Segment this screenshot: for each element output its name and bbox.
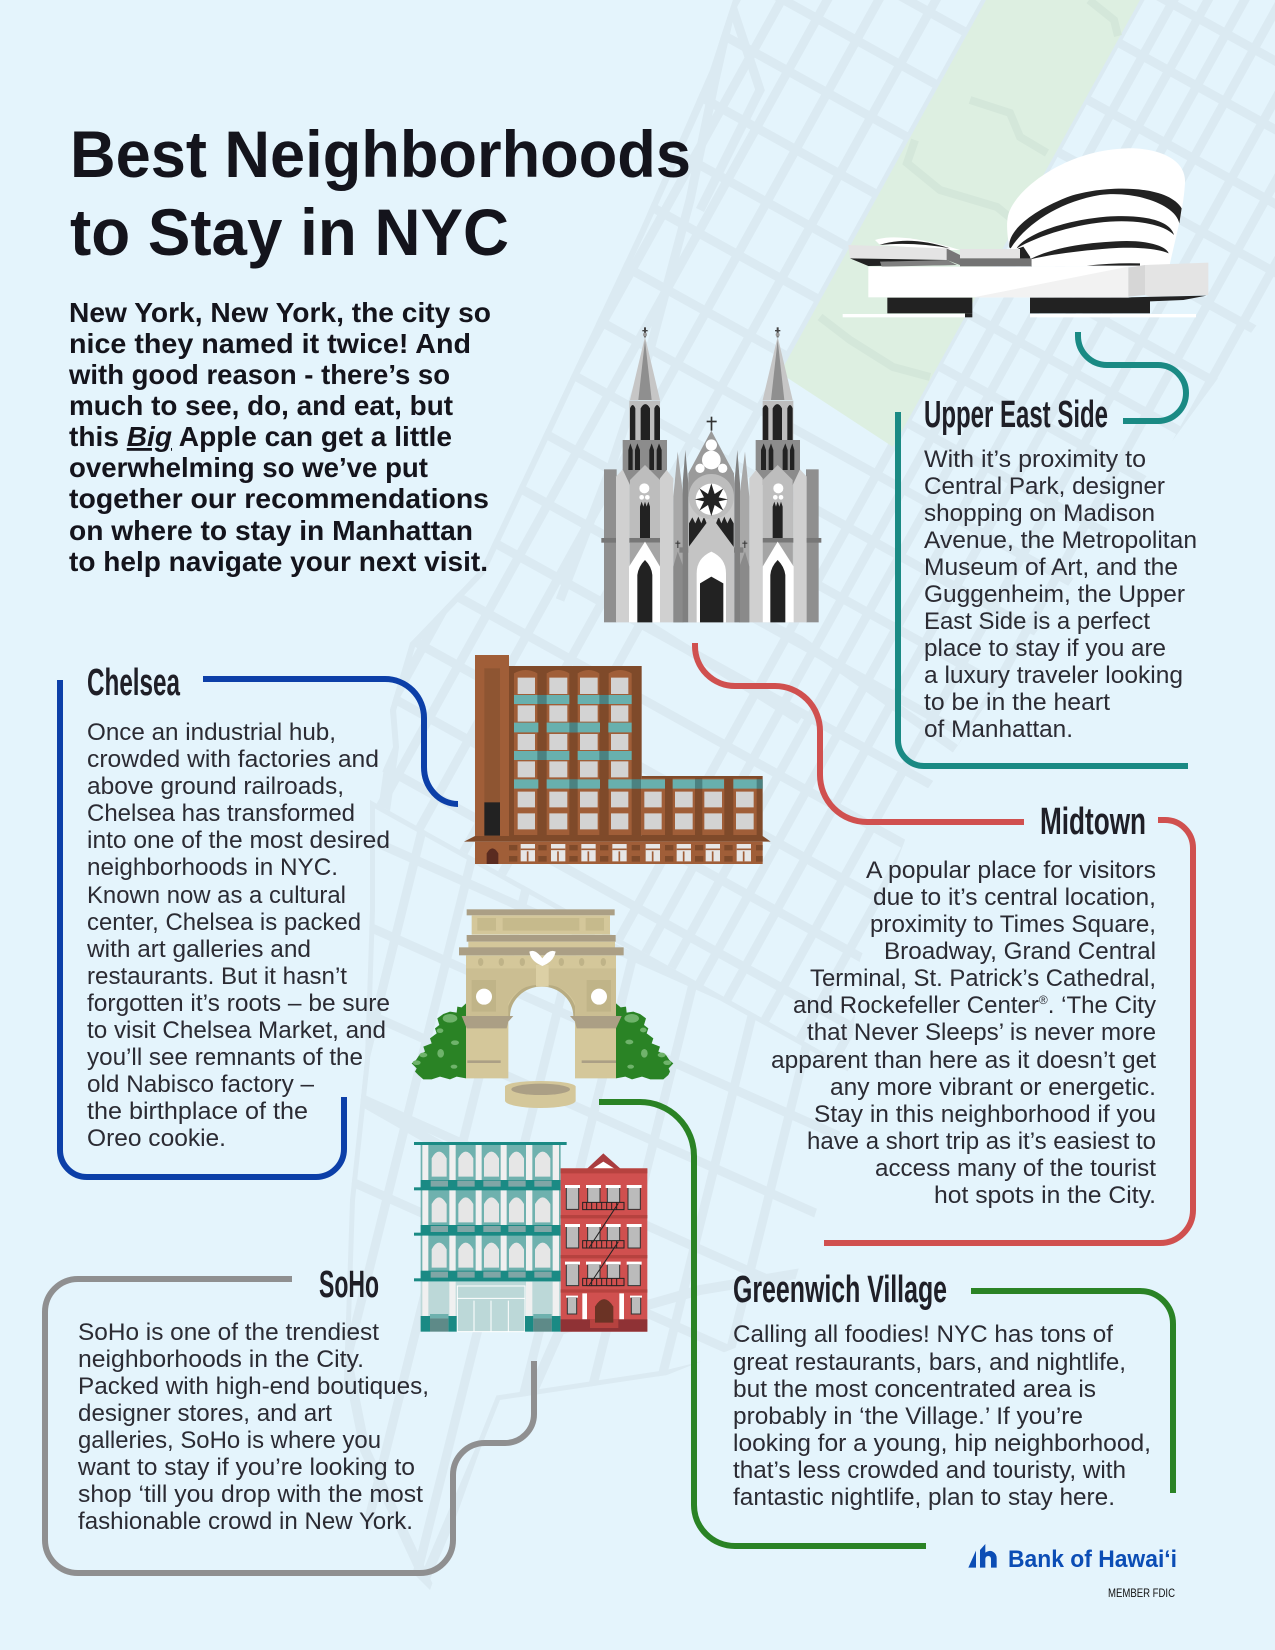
title: Best Neighborhoods bbox=[70, 117, 691, 191]
intro paragraph: New York, New York, the city so bbox=[69, 297, 491, 328]
text: Chelsea description: neighborhoods in NYC. bbox=[87, 854, 338, 881]
text: Greenwich Village description: great restaurants, bars, and nightlife, bbox=[733, 1349, 1126, 1376]
text: Midtown description: hot spots in the City. bbox=[934, 1182, 1156, 1209]
text: Midtown description bbox=[771, 857, 1156, 1209]
logo wordmark: Bank of Hawai‘i bbox=[1008, 1546, 1177, 1573]
intro paragraph: this Big Apple can get a little bbox=[69, 421, 452, 452]
text: Midtown description: any more vibrant or energetic. bbox=[830, 1074, 1156, 1101]
text: Chelsea description: with art galleries and bbox=[86, 936, 311, 963]
heading: Upper East Side: Upper East Side bbox=[924, 394, 1108, 436]
text: Upper East Side description: place to stay if you are bbox=[924, 635, 1166, 662]
connector line: Upper East Side bbox=[898, 332, 1188, 766]
text: Midtown description: A popular place for visitors bbox=[866, 857, 1156, 884]
heading: SoHo: SoHo bbox=[319, 1264, 379, 1306]
text: Chelsea description: you’ll see remnants of the bbox=[87, 1044, 363, 1071]
text: Chelsea description: Once an industrial hub, bbox=[87, 719, 336, 746]
text: Greenwich Village description: probably in ‘the Village.’ If you’re bbox=[733, 1403, 1083, 1430]
icon: Washington Square Arch bbox=[412, 909, 673, 1108]
panel: Greenwich Village bbox=[599, 1102, 1173, 1546]
text: SoHo description: designer stores, and art bbox=[78, 1400, 332, 1427]
text: SoHo description: want to stay if you’re looking to bbox=[77, 1454, 415, 1481]
text: Chelsea description: restaurants. But it hasn’t bbox=[87, 963, 347, 990]
text: Greenwich Village description: Calling all foodies! NYC has tons of bbox=[733, 1321, 1113, 1348]
icon: Guggenheim Museum bbox=[843, 148, 1208, 317]
icon: St. Patrick's Cathedral bbox=[601, 327, 821, 622]
text: Midtown description: due to it’s central location, bbox=[873, 884, 1156, 911]
connector line: Midtown bbox=[695, 643, 1193, 1243]
text: Upper East Side description: Central Park, designer bbox=[924, 473, 1165, 500]
text: Midtown description: and Rockefeller Center bbox=[793, 992, 1038, 1019]
intro paragraph: overwhelming so we’ve put bbox=[69, 452, 428, 483]
intro paragraph: together our recommendations bbox=[69, 483, 489, 514]
text: Chelsea description: old Nabisco factory – bbox=[87, 1071, 315, 1098]
connector line: SoHo bbox=[45, 1279, 534, 1573]
text: Midtown description: Terminal, St. Patrick’s Cathedral, bbox=[810, 965, 1156, 992]
panel: Chelsea bbox=[60, 662, 458, 1177]
icon: Chelsea Market building bbox=[464, 655, 771, 864]
text: Upper East Side description: a luxury traveler looking bbox=[924, 662, 1183, 689]
text: Midtown description: proximity to Times Square, bbox=[870, 911, 1156, 938]
street map of Manhattan bbox=[344, 0, 1275, 1590]
text: Upper East Side description: Guggenheim, the Upper bbox=[924, 581, 1185, 608]
panel: SoHo bbox=[45, 1264, 534, 1573]
text: Chelsea description: forgotten it’s roots – be sure bbox=[87, 990, 390, 1017]
heading: Greenwich Village: Greenwich Village bbox=[733, 1269, 947, 1311]
text: Upper East Side description: of Manhattan. bbox=[924, 716, 1073, 743]
intro paragraph: on where to stay in Manhattan bbox=[69, 515, 473, 546]
text: Upper East Side description: East Side is a perfect bbox=[924, 608, 1150, 635]
text: SoHo description: fashionable crowd in New York. bbox=[78, 1508, 413, 1535]
connector line: Greenwich Village bbox=[599, 1102, 1173, 1546]
text: Chelsea description: Known now as a cultural bbox=[87, 882, 346, 909]
text: Chelsea description: crowded with factories and bbox=[87, 746, 379, 773]
text: Midtown description: that Never Sleeps’ is never more bbox=[807, 1019, 1156, 1046]
text: Midtown description: Broadway, Grand Central bbox=[884, 938, 1156, 965]
text: Midtown description: . ‘The City bbox=[1048, 992, 1156, 1019]
icon: SoHo buildings bbox=[414, 1142, 647, 1332]
text: Chelsea description: above ground railroads, bbox=[87, 773, 344, 800]
text: Chelsea description: into one of the most desired bbox=[87, 827, 390, 854]
title bbox=[70, 117, 691, 269]
panel: Midtown bbox=[695, 643, 1193, 1243]
text: SoHo description: galleries, SoHo is where you bbox=[78, 1427, 381, 1454]
text: SoHo description: Packed with high-end boutiques, bbox=[78, 1373, 429, 1400]
text: Upper East Side description: shopping on Madison bbox=[924, 500, 1155, 527]
panel: Upper East Side bbox=[898, 332, 1197, 766]
member FDIC: MEMBER FDIC bbox=[1108, 1586, 1175, 1600]
text: Chelsea description: Chelsea has transformed bbox=[87, 800, 355, 827]
title: to Stay in NYC bbox=[70, 195, 509, 269]
text: Upper East Side description: Museum of Art, and the bbox=[924, 554, 1178, 581]
text: Greenwich Village description: but the most concentrated area is bbox=[733, 1376, 1096, 1403]
text: Greenwich Village description bbox=[733, 1321, 1151, 1511]
text: Chelsea description: the birthplace of the bbox=[87, 1098, 308, 1125]
heading: Chelsea: Chelsea bbox=[87, 662, 181, 704]
text: SoHo description: shop ‘till you drop with the most bbox=[78, 1481, 423, 1508]
connector line: Chelsea bbox=[60, 679, 458, 1177]
text: Midtown description: have a short trip as it’s easiest to bbox=[807, 1128, 1156, 1155]
intro paragraph: nice they named it twice! And bbox=[69, 328, 471, 359]
text: SoHo description bbox=[77, 1319, 429, 1535]
text: Midtown description: Stay in this neighborhood if you bbox=[814, 1101, 1156, 1128]
Central Park bbox=[780, 0, 1140, 447]
text: Midtown description: apparent than here as it doesn’t get bbox=[771, 1047, 1156, 1074]
text: Upper East Side description: With it’s proximity to bbox=[924, 446, 1146, 473]
text: Upper East Side description: Avenue, the Metropolitan bbox=[924, 527, 1197, 554]
text: SoHo description: neighborhoods in the City. bbox=[78, 1346, 364, 1373]
intro paragraph: much to see, do, and eat, but bbox=[69, 390, 453, 421]
text: Greenwich Village description: fantastic nightlife, plan to stay here. bbox=[733, 1484, 1115, 1511]
text: Chelsea description bbox=[86, 719, 390, 1152]
logo: Bank of Hawai'i bbox=[968, 1544, 1177, 1600]
text: SoHo description: SoHo is one of the trendiest bbox=[78, 1319, 379, 1346]
text: Greenwich Village description: that’s less crowded and touristy, with bbox=[733, 1457, 1126, 1484]
text: Greenwich Village description: looking for a young, hip neighborhood, bbox=[733, 1430, 1151, 1457]
text: Midtown description: access many of the tourist bbox=[875, 1155, 1156, 1182]
text: Upper East Side description bbox=[924, 446, 1197, 743]
text: Midtown description: ® bbox=[1039, 993, 1048, 1007]
text: Chelsea description: Oreo cookie. bbox=[87, 1125, 226, 1152]
icon: Bank of Hawai'i symbol bbox=[968, 1544, 997, 1568]
intro paragraph bbox=[68, 297, 491, 577]
heading: Midtown: Midtown bbox=[1040, 801, 1146, 843]
intro paragraph: to help navigate your next visit. bbox=[69, 546, 488, 577]
text: Chelsea description: center, Chelsea is packed bbox=[87, 909, 361, 936]
text: Upper East Side description: to be in the heart bbox=[924, 689, 1110, 716]
intro paragraph: with good reason - there’s so bbox=[68, 359, 450, 390]
text: Chelsea description: to visit Chelsea Market, and bbox=[87, 1017, 386, 1044]
